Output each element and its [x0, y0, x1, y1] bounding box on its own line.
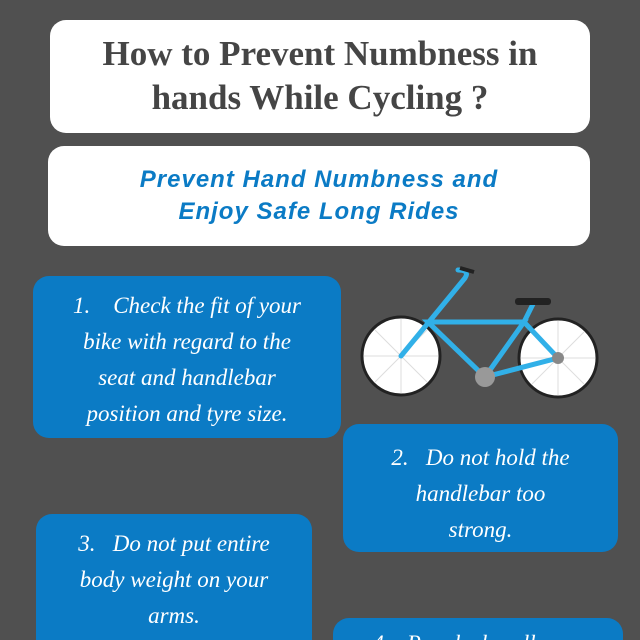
subtitle — [48, 146, 590, 246]
title: How to Prevent Numbness in — [103, 34, 537, 73]
tip 1: 1. Check the fit of your — [73, 293, 301, 318]
tip 1: seat and handlebar — [98, 365, 276, 390]
tip 1 — [33, 276, 341, 438]
tip 2 — [343, 424, 618, 552]
title — [50, 20, 590, 133]
tip 3 — [36, 514, 312, 640]
tip 3: 3. Do not put entire — [78, 531, 270, 556]
tip 1: bike with regard to the — [83, 329, 291, 354]
tip 2: 2. Do not hold the — [391, 445, 570, 470]
tip 4 — [333, 618, 623, 640]
icon: bicycle — [360, 266, 598, 398]
tip 2: handlebar too — [416, 481, 545, 506]
tip 2: strong. — [449, 517, 512, 542]
tip 3: body weight on your — [80, 567, 268, 592]
subtitle: Enjoy Safe Long Rides — [178, 198, 460, 225]
tip 3: arms. — [148, 603, 200, 628]
tip 1: position and tyre size. — [86, 401, 288, 426]
subtitle: Prevent Hand Numbness and — [140, 166, 498, 193]
title: hands While Cycling ? — [152, 78, 488, 117]
